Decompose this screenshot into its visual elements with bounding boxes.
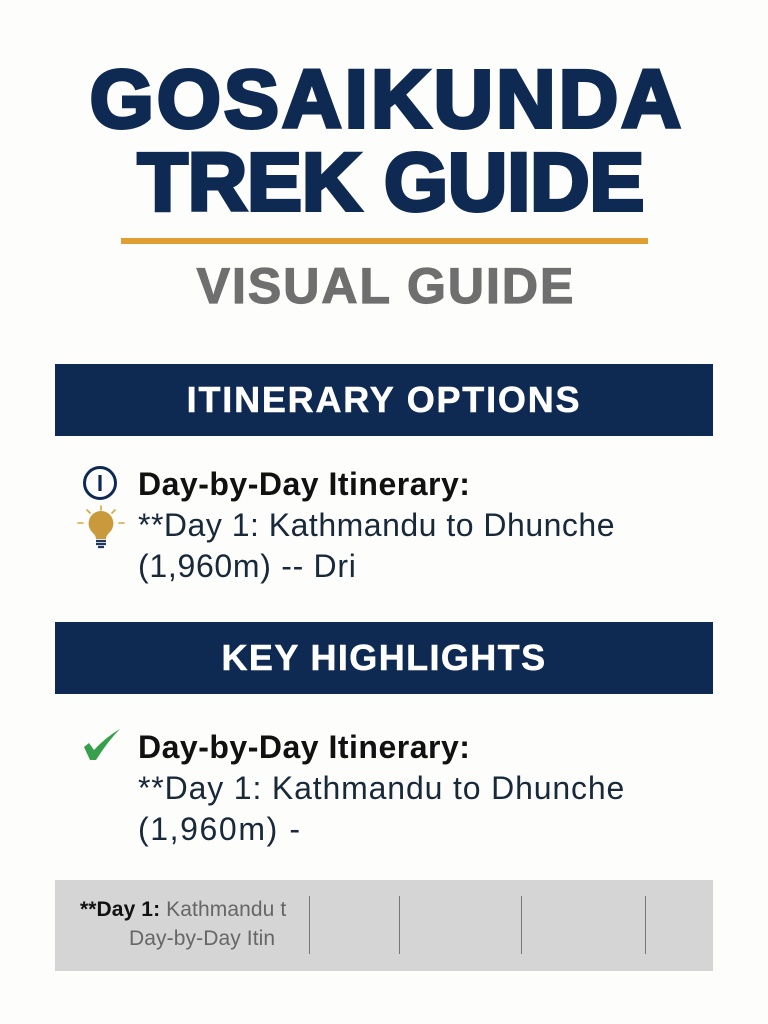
subtitle: VISUAL GUIDE	[197, 258, 575, 314]
text block: itinerary: Day-by-Day Itinerary:	[138, 466, 470, 502]
title	[90, 54, 684, 228]
text block: highlights: **Day 1: Kathmandu to Dhunche	[138, 770, 625, 806]
icon: check mark	[84, 729, 120, 760]
icon: info circle	[83, 466, 117, 500]
title: TREK GUIDE	[138, 136, 644, 228]
heading: key highlights: KEY HIGHLIGHTS	[222, 637, 546, 678]
table cell text: **Day 1: Kathmandu t	[80, 898, 286, 921]
title: GOSAIKUNDA	[90, 54, 684, 145]
heading: key highlights	[55, 622, 713, 694]
icon: light bulb	[77, 505, 125, 548]
text block: highlights	[138, 729, 625, 847]
title underline	[121, 238, 648, 244]
heading: itinerary options	[55, 364, 713, 436]
table cell text	[80, 898, 286, 950]
panel: table strip	[55, 880, 713, 971]
text block: itinerary: **Day 1: Kathmandu to Dhunche	[138, 507, 615, 543]
table cell text: Day-by-Day Itin	[129, 927, 275, 950]
text block: itinerary	[138, 466, 615, 584]
heading: itinerary options: ITINERARY OPTIONS	[187, 379, 581, 420]
text block: highlights: Day-by-Day Itinerary:	[138, 729, 470, 765]
text block: itinerary: (1,960m) -- Dri	[138, 548, 357, 584]
text block: highlights: (1,960m) -	[138, 811, 302, 847]
